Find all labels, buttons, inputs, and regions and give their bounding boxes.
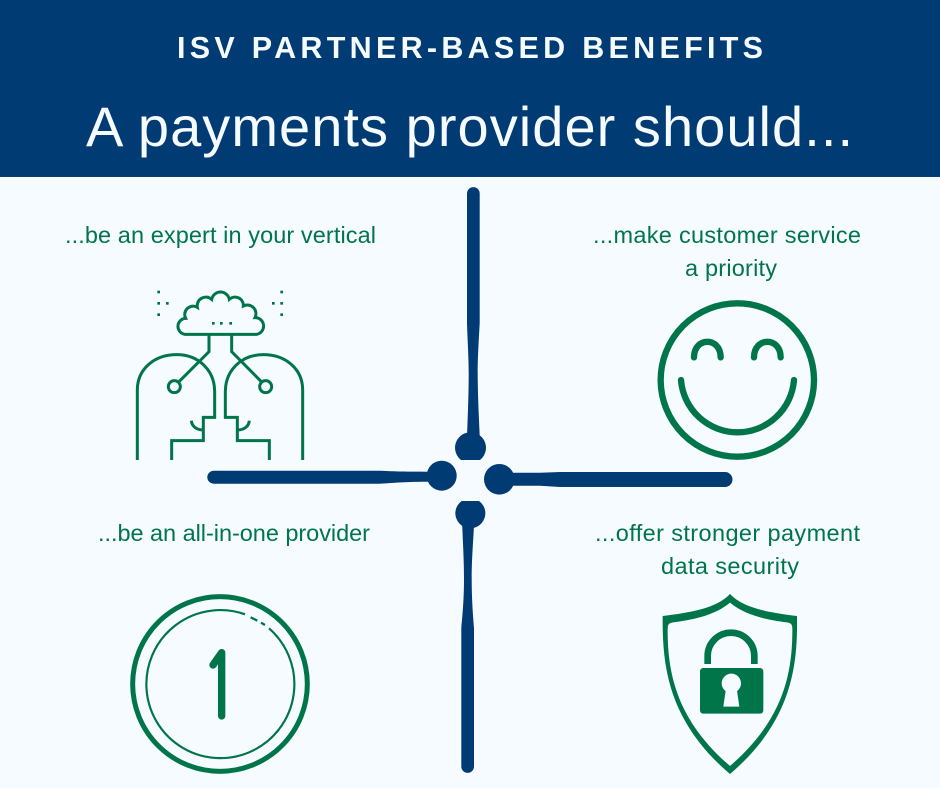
icon: shield with padlock: [663, 594, 797, 774]
central cross divider: [207, 187, 732, 773]
caption: data security: ...offer stronger payment: [595, 520, 860, 546]
panel: vertical expertise: [65, 222, 376, 460]
caption: customer service: a priority: [685, 255, 777, 281]
icon: number one in a circle: [133, 597, 307, 771]
caption: customer service: ...make customer service: [593, 222, 861, 248]
left arm: [207, 461, 457, 491]
caption: all-in-one: ...be an all-in-one provider: [98, 520, 370, 546]
panel: all-in-one provider: [98, 520, 370, 771]
icon: two heads sharing a cloud: [137, 291, 303, 460]
caption: be an expert: ...be an expert in your vertical: [65, 222, 376, 248]
right arm: [484, 464, 732, 495]
header band: [0, 0, 940, 177]
heading: ISV partner-based benefits: ISV PARTNER-BASED BENEFITS: [177, 31, 763, 65]
caption: data security: data security: [661, 553, 799, 579]
bottom arm: [455, 501, 485, 773]
top arm: [455, 187, 486, 460]
panel: customer service: [593, 222, 861, 457]
panel: payment data security: [595, 520, 860, 774]
title: a payments provider should: A payments provider should...: [86, 95, 853, 158]
icon: smiley face: [661, 303, 814, 457]
